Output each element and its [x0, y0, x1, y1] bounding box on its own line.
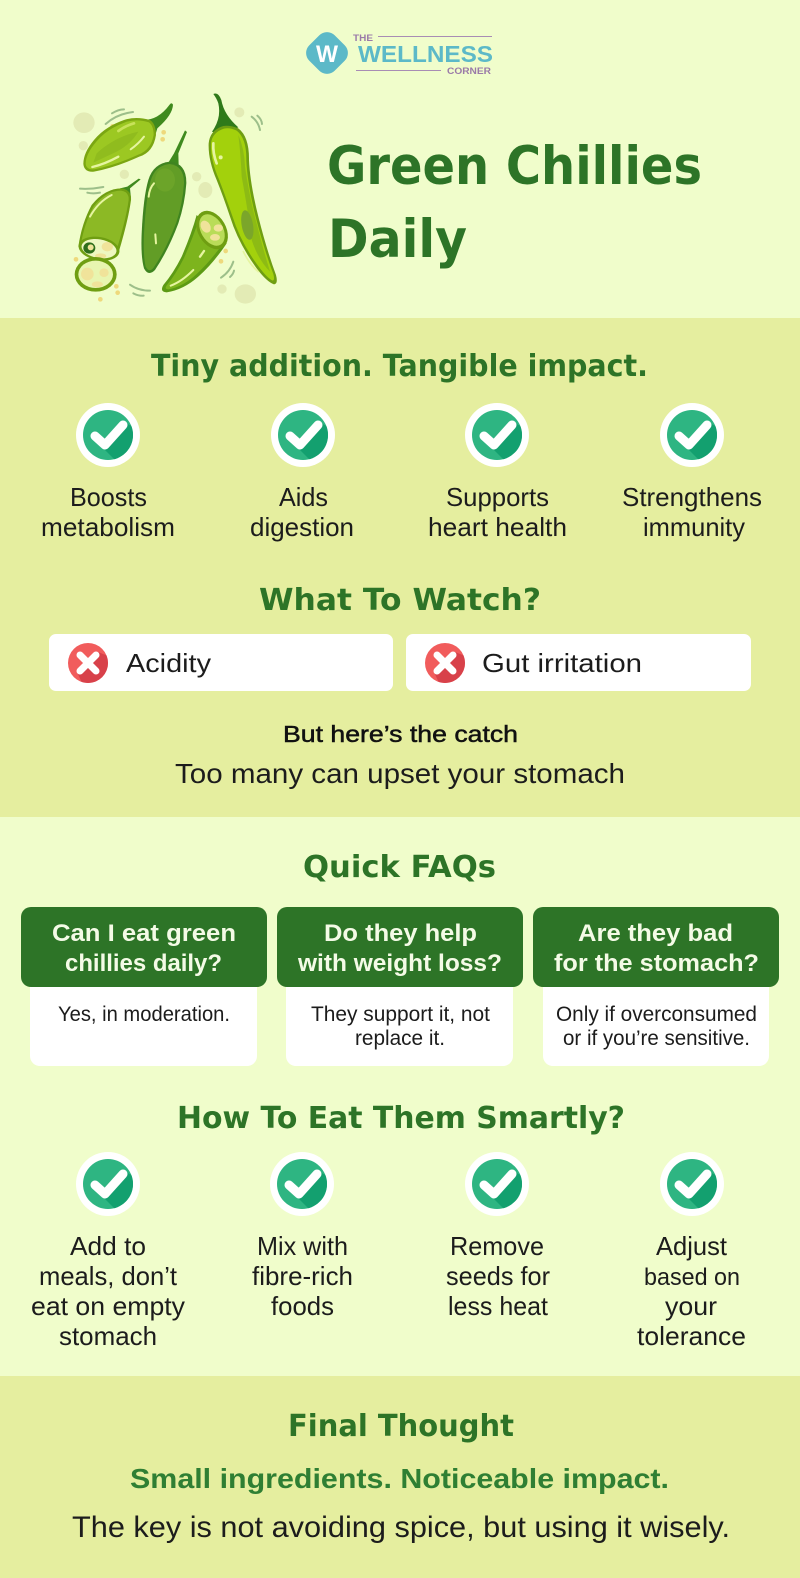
chilli: cut left	[77, 179, 141, 264]
chilli: bottom cut	[162, 205, 234, 292]
final thought: The key is not avoiding spice, but using it wisely.	[72, 1511, 730, 1544]
tip: adjust tolerance: Adjust	[656, 1231, 728, 1261]
title	[327, 136, 702, 270]
FAQ card 3: or if you’re sensitive.	[563, 1027, 750, 1050]
logo: The Wellness Corner: W	[316, 41, 338, 68]
benefit: aids digestion	[250, 403, 354, 542]
tip: adjust tolerance: tolerance	[637, 1321, 746, 1351]
title: Daily	[328, 209, 467, 270]
logo: The Wellness Corner: WELLNESS	[358, 41, 493, 67]
FAQ card 1: Can I eat green	[52, 920, 236, 947]
heading: how to eat them smartly: How To Eat Them Smartly?	[177, 1101, 625, 1136]
tip: add to meals: meals, don’t	[39, 1261, 178, 1291]
title: Green Chillies	[327, 136, 702, 197]
heading: tiny addition: Tiny addition. Tangible impact.	[151, 349, 648, 384]
warning pill: acidity: Acidity	[126, 648, 211, 678]
FAQ card 2: replace it.	[355, 1027, 445, 1050]
FAQ card 2	[277, 907, 523, 1066]
tip: remove seeds: seeds for	[446, 1261, 550, 1291]
FAQ card 1	[21, 907, 267, 1066]
final thought	[72, 1409, 730, 1544]
heading: quick FAQs: Quick FAQs	[303, 850, 496, 885]
benefit: strengthens immunity: Strengthens	[622, 482, 762, 512]
chilli: middle	[141, 130, 187, 273]
tip: add to meals: eat on empty	[31, 1291, 185, 1321]
tip: mix with fibre-rich foods: foods	[271, 1291, 334, 1321]
catch text: But here’s the catch	[283, 721, 518, 747]
tip: adjust tolerance: your	[665, 1291, 717, 1321]
heading: what to watch: What To Watch?	[259, 583, 541, 618]
benefit: boosts metabolism	[41, 403, 175, 542]
chilli: round slice	[75, 257, 117, 292]
FAQ card 2: with weight loss?	[297, 950, 502, 977]
logo: The Wellness Corner: CORNER	[447, 66, 491, 77]
chilli: top left	[83, 103, 173, 172]
benefit: aids digestion: Aids	[279, 482, 328, 512]
catch text: Too many can upset your stomach	[175, 758, 625, 789]
tip: add to meals: stomach	[59, 1321, 157, 1351]
tip: remove seeds	[446, 1152, 550, 1321]
FAQ card 3: Only if overconsumed	[556, 1003, 757, 1026]
benefit: supports heart health	[428, 403, 567, 542]
benefit: boosts metabolism: Boosts	[70, 482, 147, 512]
tip: adjust tolerance	[637, 1152, 746, 1351]
final thought: Small ingredients. Noticeable impact.	[130, 1463, 669, 1494]
benefit: strengthens immunity: immunity	[643, 512, 745, 542]
benefit: boosts metabolism: metabolism	[41, 512, 175, 542]
tip: adjust tolerance: based on	[644, 1264, 740, 1291]
warning pill: gut irritation: Gut irritation	[482, 648, 642, 678]
FAQ card 1: chillies daily?	[65, 950, 222, 977]
tip: remove seeds: Remove	[450, 1231, 544, 1261]
FAQ card 1: Yes, in moderation.	[58, 1003, 230, 1026]
tip: mix with fibre-rich foods: Mix with	[257, 1231, 348, 1261]
benefit: strengthens immunity	[622, 403, 762, 542]
benefit: supports heart health: Supports	[446, 482, 549, 512]
final thought: Final Thought	[288, 1409, 514, 1444]
benefit: aids digestion: digestion	[250, 512, 354, 542]
warning pill: gut irritation	[406, 634, 751, 691]
FAQ card 3	[533, 907, 779, 1066]
illustration: green chillies	[73, 93, 277, 304]
warning pill: acidity	[49, 634, 393, 691]
tip: mix with fibre-rich foods: fibre-rich	[252, 1261, 353, 1291]
benefit: supports heart health: heart health	[428, 512, 567, 542]
FAQ card 3: for the stomach?	[554, 950, 759, 977]
tip: add to meals: Add to	[70, 1231, 146, 1261]
decorative blobs and seeds	[73, 107, 262, 304]
tip: remove seeds: less heat	[448, 1291, 549, 1321]
catch text	[175, 721, 625, 789]
tip: add to meals	[31, 1152, 185, 1351]
chilli: large right	[209, 93, 277, 284]
logo: The Wellness Corner	[302, 28, 493, 78]
FAQ card 2: They support it, not	[311, 1003, 490, 1026]
FAQ card 3: Are they bad	[578, 920, 733, 947]
logo: The Wellness Corner: THE	[353, 33, 373, 44]
FAQ card 2: Do they help	[324, 920, 477, 947]
tip: mix with fibre-rich foods	[252, 1152, 353, 1321]
